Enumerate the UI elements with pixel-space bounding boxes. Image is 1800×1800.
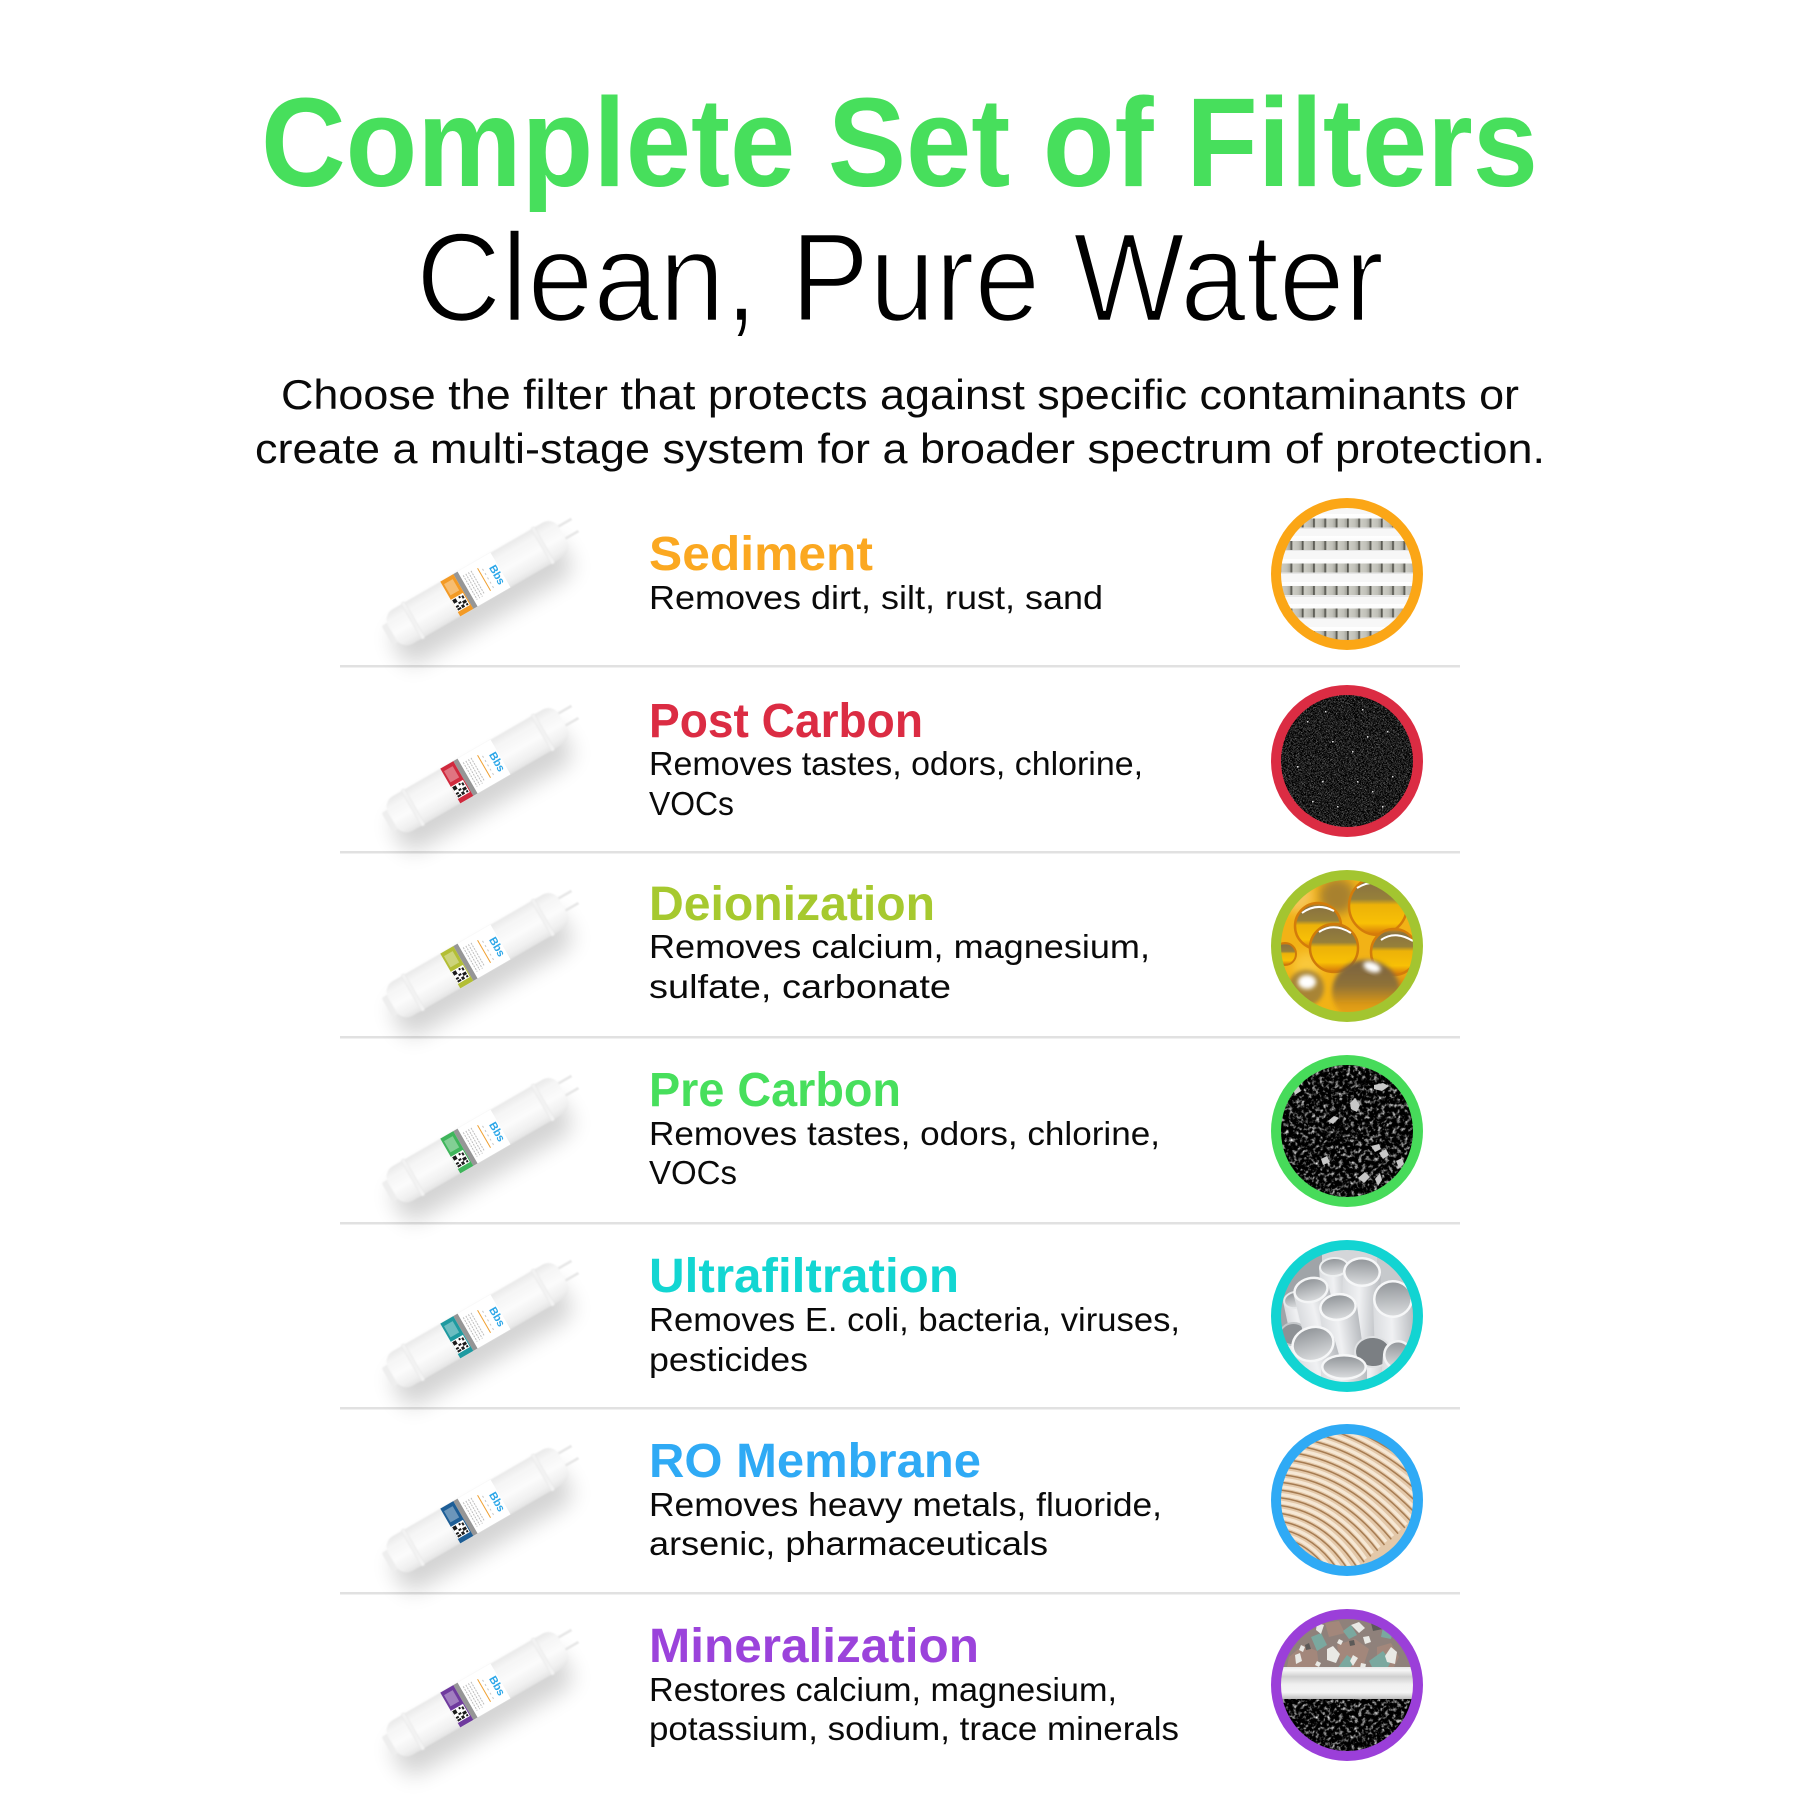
filter cartridge: Sediment: Bbs <box>486 563 507 587</box>
filter cartridge: Deionization: Bbs <box>486 935 507 959</box>
icon: fine carbon granules <box>1276 690 1418 832</box>
description: Ultrafiltration <box>649 1301 1180 1378</box>
row: RO Membrane <box>377 1397 1461 1597</box>
description: RO Membrane <box>649 1486 1162 1562</box>
icon: coarse carbon granules <box>1276 1060 1418 1202</box>
description: Pre Carbon: Removes tastes, odors, chlorine, <box>649 1115 1160 1152</box>
description: Ultrafiltration: pesticides <box>649 1341 808 1378</box>
description: Pre Carbon: VOCs <box>649 1154 737 1191</box>
filter cartridge: Ultrafiltration <box>377 1250 596 1412</box>
filter cartridge: Mineralization <box>377 1619 596 1781</box>
description: Mineralization: Restores calcium, magnesium, <box>649 1671 1117 1708</box>
intro paragraph <box>255 371 1545 472</box>
filter cartridge: Mineralization: Bbs <box>486 1674 507 1698</box>
filter cartridge: Pre Carbon: Bbs <box>486 1120 507 1144</box>
description: Mineralization: potassium, sodium, trace minerals <box>649 1710 1179 1747</box>
heading: RO Membrane: RO Membrane <box>649 1435 981 1488</box>
row: Deionization <box>377 875 1418 1042</box>
icon: spiral-wound membrane <box>1263 1397 1461 1596</box>
heading: Post Carbon: Post Carbon <box>649 695 923 748</box>
heading: Pre Carbon: Pre Carbon <box>649 1064 901 1117</box>
filter cartridge: Post Carbon: Bbs <box>486 750 507 774</box>
filter cartridge: RO Membrane <box>377 1435 596 1597</box>
description: Post Carbon: VOCs <box>649 785 734 822</box>
description: Mineralization <box>649 1671 1179 1747</box>
heading: Mineralization: Mineralization <box>649 1620 979 1673</box>
filter cartridge: Deionization <box>377 880 596 1042</box>
intro paragraph: Choose the filter that protects against specific contaminants or <box>281 371 1519 418</box>
icon: mineral layers <box>1276 1614 1418 1758</box>
description: RO Membrane: Removes heavy metals, fluoride, <box>649 1486 1162 1523</box>
title: Complete Set of Filters: Complete Set of Filters <box>261 72 1538 213</box>
heading: Ultrafiltration: Ultrafiltration <box>649 1250 959 1303</box>
row: Sediment <box>377 503 1418 670</box>
row: Ultrafiltration <box>377 1245 1418 1412</box>
description: Ultrafiltration: Removes E. coli, bacteria, viruses, <box>649 1301 1180 1338</box>
description: Post Carbon <box>649 745 1143 822</box>
heading: Sediment: Sediment <box>649 528 873 581</box>
icon: pleated sediment media <box>1276 503 1418 645</box>
row: Mineralization <box>377 1614 1418 1781</box>
subtitle: Clean, Pure Water: Clean, Pure Water <box>416 207 1384 348</box>
icon: amber resin beads <box>1274 875 1418 1024</box>
description: RO Membrane: arsenic, pharmaceuticals <box>649 1525 1048 1562</box>
description: Sediment: Removes dirt, silt, rust, sand <box>649 579 1103 616</box>
row: Pre Carbon <box>377 1060 1418 1227</box>
description: Deionization <box>649 928 1150 1005</box>
row: Post Carbon <box>377 690 1418 857</box>
description: Post Carbon: Removes tastes, odors, chlorine, <box>649 745 1143 782</box>
description: Deionization: Removes calcium, magnesium, <box>649 928 1150 965</box>
filter cartridge: Ultrafiltration: Bbs <box>486 1305 507 1329</box>
description: Deionization: sulfate, carbonate <box>649 968 951 1005</box>
heading: Deionization: Deionization <box>649 878 935 931</box>
filter cartridge: Sediment <box>377 508 596 670</box>
filter cartridge: RO Membrane: Bbs <box>486 1490 507 1514</box>
icon: hollow fibre tubes <box>1276 1245 1418 1393</box>
filter cartridge: Post Carbon <box>377 695 596 857</box>
intro paragraph: create a multi-stage system for a broader spectrum of protection. <box>255 425 1545 472</box>
filter cartridge: Pre Carbon <box>377 1065 596 1227</box>
description: Pre Carbon <box>649 1115 1160 1191</box>
